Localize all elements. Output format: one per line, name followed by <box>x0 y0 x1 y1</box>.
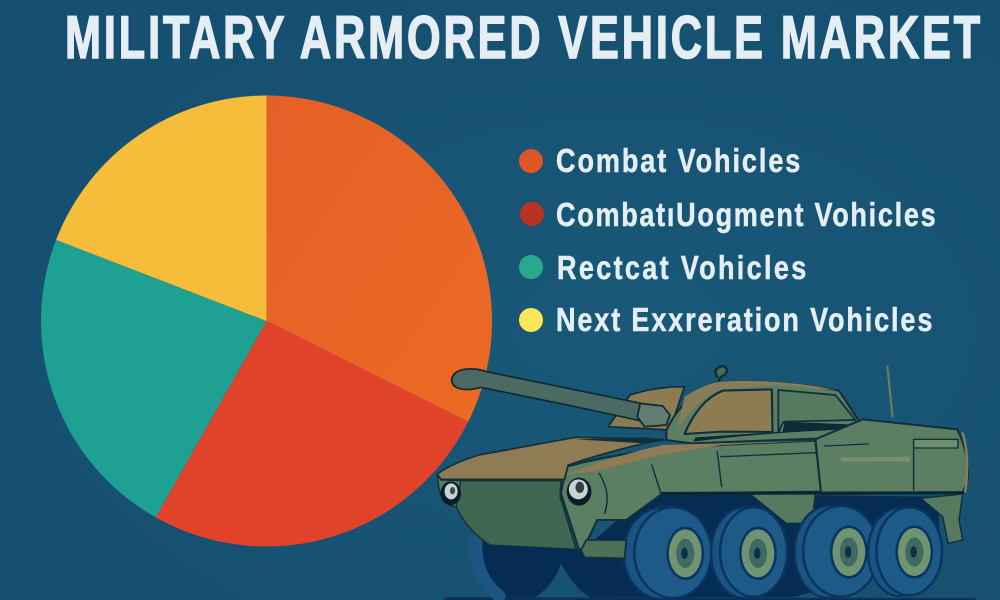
cabin green window <box>778 390 855 433</box>
deck shadow <box>575 437 666 443</box>
antenna <box>887 367 892 417</box>
rear hull <box>815 419 968 494</box>
slice: combat support vehicles <box>156 321 468 546</box>
gun barrel <box>452 369 645 422</box>
gun mantlet <box>637 403 670 427</box>
cabin tan window <box>685 389 773 434</box>
slice: next generation vehicles <box>56 96 266 321</box>
legend <box>519 144 936 339</box>
slice: combat vehicles <box>266 96 492 422</box>
legend item: next generation vehicles: Next Exxreration Vohicles <box>556 303 932 339</box>
cupola hatch <box>715 366 727 382</box>
rear hidden wheel <box>476 542 499 596</box>
illustration: armored vehicle <box>437 366 975 600</box>
slice: reconnaissance vehicles <box>41 240 266 517</box>
wheel 2 <box>711 507 787 598</box>
left headlight <box>441 481 461 505</box>
wheel 3 <box>795 506 879 598</box>
wheel 4 <box>868 507 942 596</box>
side tan strip <box>567 441 815 474</box>
side panel lines <box>599 452 815 513</box>
legend item: combat vehicles: Combat Vohicles <box>556 144 800 180</box>
side hull <box>561 441 821 550</box>
cabin shadow <box>694 422 863 442</box>
ground shadow <box>445 597 975 600</box>
title: MILITARY ARMORED VEHICLE MARKET <box>65 5 980 72</box>
lower side skirt <box>581 540 626 558</box>
rear panel lines <box>825 444 914 490</box>
pie chart <box>41 96 492 546</box>
legend item: combat support vehicles: CombatıUogment Vohicles <box>556 198 936 234</box>
glacis tan <box>437 437 663 479</box>
cabin <box>666 382 865 443</box>
hull bottom rim <box>663 488 963 498</box>
right headlight <box>567 478 591 506</box>
rear hull tan highlight <box>963 433 967 492</box>
roof tan <box>677 381 837 428</box>
wheel 1 <box>623 507 711 599</box>
legend item: reconnaissance vehicles: Rectcat Vohicles <box>557 251 806 287</box>
dark undercarriage <box>475 493 939 597</box>
hull lower sides <box>750 494 815 523</box>
front plate <box>456 481 576 549</box>
wheels <box>623 506 942 599</box>
left front corner <box>437 475 461 507</box>
rear vent <box>914 439 958 448</box>
turret top <box>608 387 685 430</box>
